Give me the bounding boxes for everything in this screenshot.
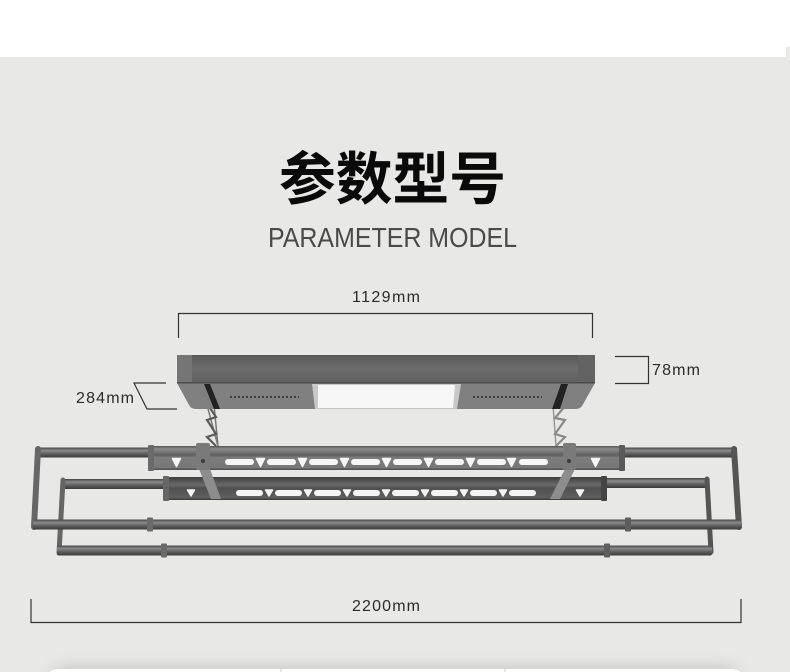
lifting arm right xyxy=(553,405,566,446)
slots xyxy=(225,459,548,465)
front inner bar xyxy=(57,544,712,558)
bottom spec card xyxy=(46,669,744,672)
LED light panel xyxy=(312,384,461,409)
dimension: depth 284mm: 284mm xyxy=(76,390,134,407)
right bracket xyxy=(550,443,576,499)
drying rack product xyxy=(33,355,741,558)
lower hanging plate xyxy=(163,476,607,501)
speaker vents xyxy=(230,396,542,398)
dimension: depth 284mm xyxy=(76,383,177,409)
lifting arm left xyxy=(207,405,218,446)
left bracket xyxy=(196,443,221,499)
right mount slot xyxy=(552,384,568,409)
dimension: width of main unit 1129mm: 1129mm xyxy=(352,289,420,306)
left mount slot xyxy=(204,384,220,409)
dimension: total width 2200mm xyxy=(31,598,741,622)
dimension: height 78mm xyxy=(615,356,700,384)
title: 参数型号 xyxy=(279,134,506,216)
side bars xyxy=(34,449,739,553)
slots xyxy=(236,490,536,496)
main unit housing xyxy=(177,355,595,409)
front outer bar xyxy=(33,518,741,532)
subtitle: PARAMETER MODEL xyxy=(268,222,517,253)
dimension: total width 2200mm: 2200mm xyxy=(352,598,420,615)
upper hanging plate xyxy=(148,445,625,471)
rear outer rail tubes xyxy=(37,448,737,458)
dimension: height 78mm: 78mm xyxy=(652,362,700,379)
heart holes xyxy=(172,458,600,466)
heart holes xyxy=(188,490,584,496)
dimension: width of main unit 1129mm xyxy=(178,289,592,338)
rear inner rail tubes xyxy=(62,478,708,489)
